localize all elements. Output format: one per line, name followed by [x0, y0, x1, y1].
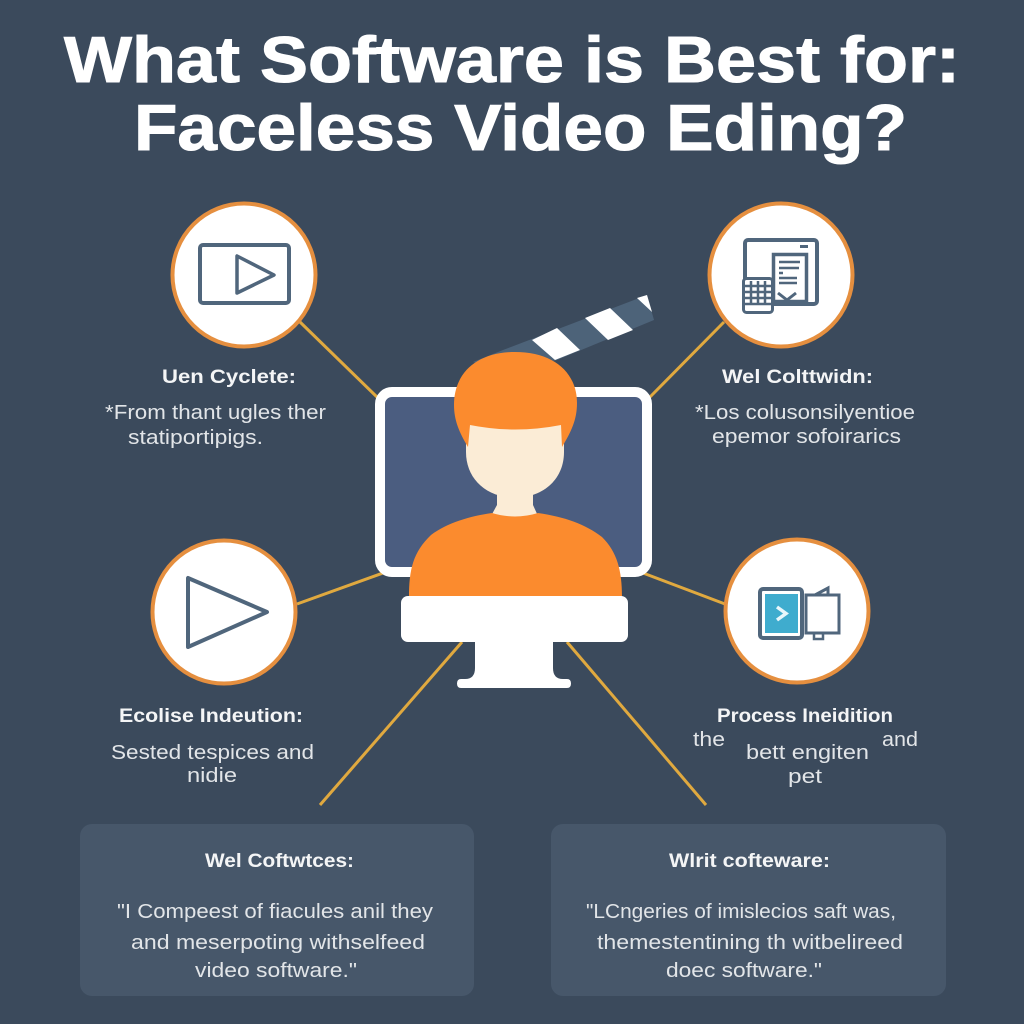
text: middle right: Process Ineidition — [717, 706, 893, 727]
text: middle left: Sested tespices and — [111, 742, 314, 764]
title — [64, 23, 960, 164]
icon circle: tablet, document and calculator — [710, 204, 852, 346]
panel: bottom left: and meserpoting withselfeed — [131, 932, 425, 954]
text: top left: statiportipigs. — [128, 427, 263, 449]
text: top right — [695, 367, 915, 448]
text: top left: *From thant ugles ther — [105, 402, 326, 424]
panel: bottom left: Wel Coftwtces: — [205, 851, 354, 872]
person face — [466, 425, 564, 498]
text: middle left — [111, 706, 314, 787]
icon circle: tablet and monitor — [726, 540, 868, 682]
text: middle right: the — [693, 729, 725, 751]
monitor screen — [380, 392, 647, 572]
text: top right: *Los colusonsilyentioe — [695, 402, 915, 424]
monitor stand — [457, 640, 571, 688]
text: middle left: nidie — [187, 765, 237, 787]
icon: clapperboard — [473, 295, 654, 372]
text: middle left: Ecolise Indeution: — [119, 706, 303, 727]
person body — [409, 513, 622, 597]
text: top left: Uen Cyclete: — [162, 367, 296, 388]
panel: bottom left: video software." — [195, 960, 357, 982]
panel: bottom right: "LCngeries of imislecios saft was, — [586, 901, 896, 923]
panel: bottom left: "I Compeest of fiacules anil they — [117, 901, 433, 923]
monitor base bar — [401, 596, 628, 642]
panel: bottom right: doec software." — [666, 960, 822, 982]
person neck — [491, 490, 538, 520]
text: middle right: pet — [788, 766, 823, 788]
text: top right: epemor sofoirarics — [712, 426, 901, 448]
icon circle: play triangle — [152, 540, 296, 684]
text: middle right — [693, 706, 918, 788]
text: top left — [105, 367, 326, 449]
text: middle right: and — [882, 729, 918, 751]
text: top right: Wel Colttwidn: — [722, 367, 873, 388]
panel: bottom right — [551, 824, 946, 996]
panel: bottom right: Wlrit cofteware: — [669, 851, 830, 872]
icon circle: video frame with play — [172, 204, 316, 346]
central monitor with faceless person — [380, 352, 647, 688]
title: Faceless Video Eding? — [134, 91, 907, 164]
connector lines — [297, 322, 725, 805]
title: What Software is Best for: — [64, 23, 960, 96]
panel: bottom right: themestentining th witbelireed — [597, 932, 903, 954]
text: middle right: bett engiten — [746, 742, 869, 764]
person hair — [454, 352, 577, 447]
panel: bottom left — [80, 824, 474, 996]
